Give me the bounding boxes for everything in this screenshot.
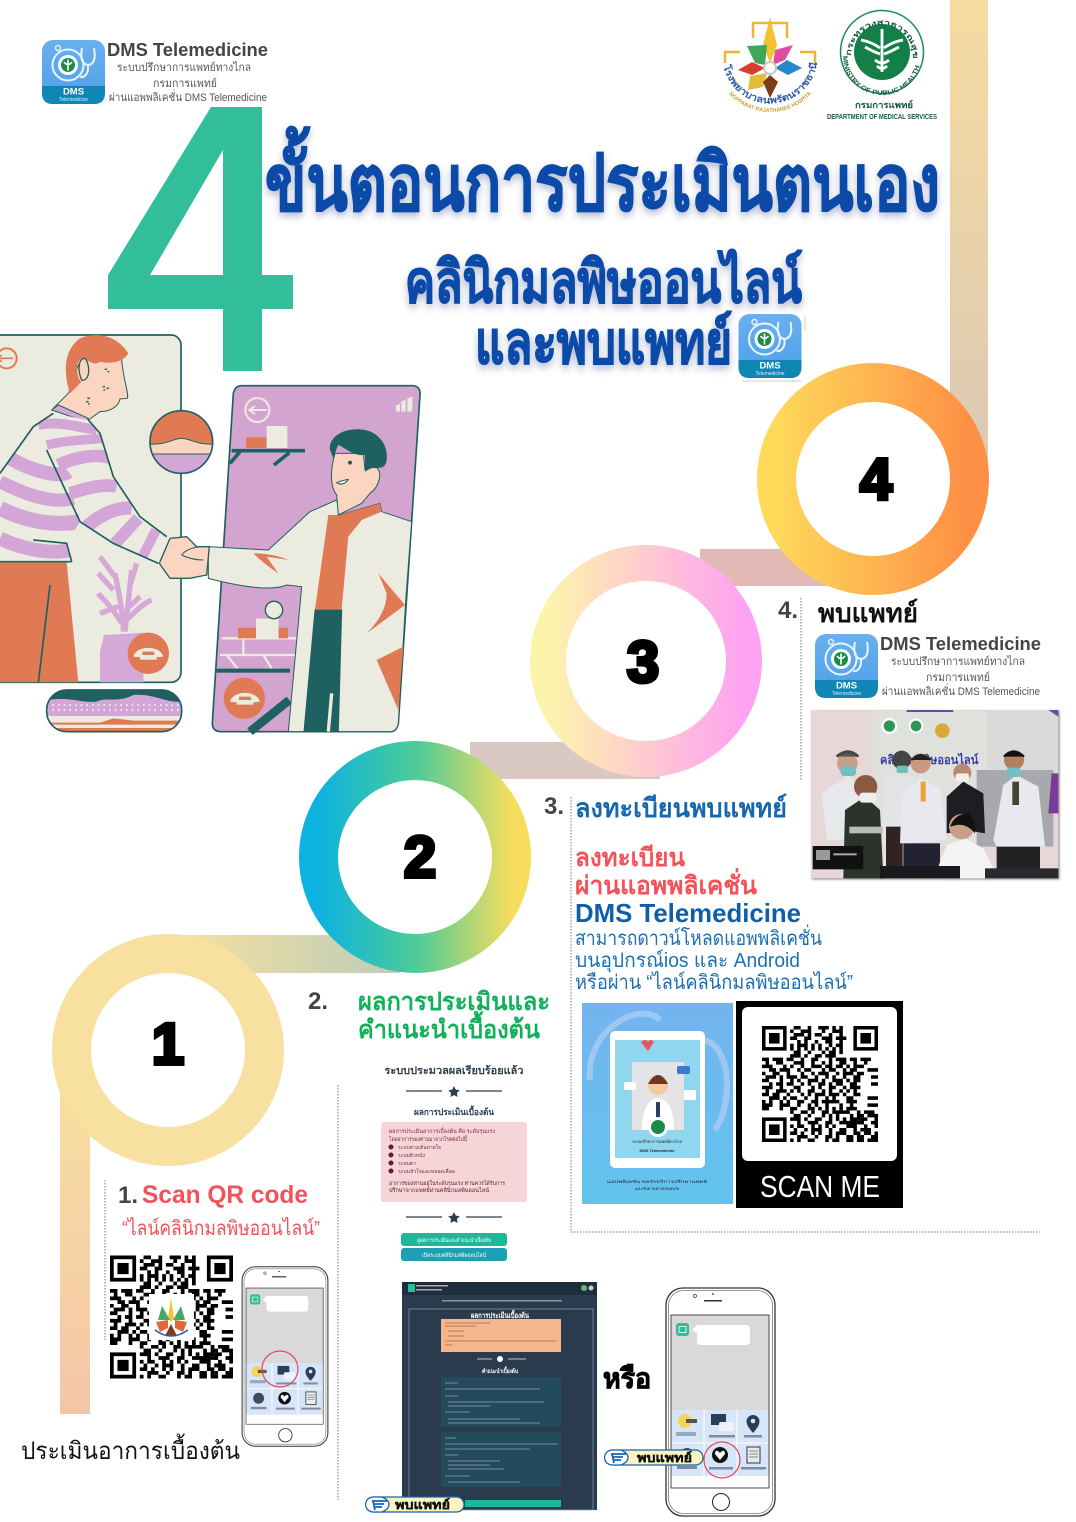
step 3 description: บนอุปกรณ์ios และ Android	[575, 949, 800, 973]
result box: ผลการประเมินอาการเบื้องต้น คือ ระดับรุนแรง	[389, 1127, 495, 1135]
logo: ministry of public health: DEPARTMENT OF MEDICAL SERVICES	[827, 114, 937, 121]
app poster: ระบบปรึกษาการแพทย์ทางไกล	[632, 1139, 683, 1144]
result screen: dark: ผลการประเมินเบื้องต้น	[471, 1309, 530, 1320]
logo: ministry of public health	[827, 10, 937, 121]
logo: DMS Telemedicine step 4: ผ่านแอพพลิเคชั่น DMS Telemedicine	[882, 683, 1040, 698]
step 3 description: สามารถดาวน์โหลดแอพพลิเคชั่น	[575, 924, 822, 950]
caption: initial symptom assessment: ประเมินอาการเบื้องต้น	[21, 1433, 240, 1465]
app poster	[582, 1003, 733, 1204]
phone: LINE menu step 2	[666, 1288, 775, 1516]
logo: DMS Telemedicine header: DMS Telemedicine	[107, 40, 268, 60]
badge: see doctor, dark screen	[366, 1497, 464, 1512]
step 1 heading: Scan QR code	[142, 1181, 308, 1209]
step 3 description: DMS Telemedicine	[575, 898, 801, 928]
result screen: light: ดูผลการประเมินและคำแนะนำเบื้องต้น	[417, 1236, 491, 1244]
step 2 heading: ผลการประเมินและ	[358, 988, 550, 1016]
result screen: light: เปิดระบบคลินิกมลพิษออนไลน์	[422, 1252, 486, 1259]
badge: see doctor, phone: พบแพทย์	[637, 1451, 692, 1465]
step ring 2	[318, 760, 512, 954]
result screen: light: ผลการประเมินเบื้องต้น	[414, 1105, 495, 1117]
QR code: scan me	[736, 1001, 903, 1208]
highlight circle	[704, 1442, 740, 1478]
badge: see doctor, phone	[604, 1450, 703, 1465]
photo: doctors at online clinic launch	[811, 710, 1058, 878]
step 3 description	[575, 844, 853, 994]
step 3 heading: 3.	[544, 793, 564, 820]
QR code: LINE clinic	[110, 1257, 233, 1377]
icon: DMS app	[738, 314, 805, 381]
step ring 1	[72, 954, 264, 1146]
logo: DMS Telemedicine header: ผ่านแอพพลิเคชั่น DMS Telemedicine	[109, 89, 267, 104]
result box: อาการของท่านอยู่ในระดับรุนแรง ท่านควรได้รับการ	[389, 1180, 505, 1187]
logo: DMS Telemedicine step 4: ระบบปรึกษาการแพทย์ทางไกล	[891, 655, 1025, 668]
patient panel	[0, 335, 181, 682]
logo: DMS Telemedicine header: กรมการแพทย์	[153, 77, 217, 90]
step ring 3: 3	[627, 630, 659, 695]
logo: ministry of public health: MINISTRY OF PUBLIC HEALTH	[842, 56, 920, 96]
handshake	[159, 537, 209, 578]
result screen: light	[381, 1064, 527, 1261]
logo: hospital	[724, 17, 818, 112]
step 1 heading: 1.	[118, 1182, 138, 1209]
step 4 heading: 4.	[778, 597, 798, 624]
result box: ระบบทางเดินหายใจ	[398, 1144, 441, 1151]
logo: DMS Telemedicine step 4: DMS Telemedicine	[880, 634, 1041, 654]
result screen: dark: คำแนะนำเบื้องต้น	[482, 1365, 519, 1375]
pill detail	[47, 690, 182, 733]
result box: ระบบหัวใจและหลอดเลือด	[398, 1168, 455, 1175]
step 4 heading	[778, 597, 918, 628]
result box	[381, 1122, 527, 1202]
logo: DMS Telemedicine header: ระบบปรึกษาการแพทย์ทางไกล	[117, 61, 251, 74]
step 1 heading	[118, 1181, 320, 1240]
subtitle line 2: และพบแพทย์	[475, 310, 732, 376]
step 2 heading: คำแนะนำเบื้องต้น	[358, 1010, 540, 1044]
circle detail	[150, 410, 213, 473]
step ring 2: 2	[404, 825, 436, 890]
app poster: แอปพลิเคชัน ขอรับบริการปรึกษาแพทย์	[607, 1179, 707, 1184]
result box: ระบบผิวหนัง	[398, 1152, 426, 1159]
subtitle line 1: คลินิกมลพิษออนไลน์	[405, 249, 802, 315]
step 3 heading: ลงทะเบียนพบแพทย์	[575, 793, 787, 823]
logo: ministry of public health: กรมการแพทย์	[855, 99, 913, 110]
logo: DMS Telemedicine step 4: กรมการแพทย์	[926, 671, 990, 684]
step 3 description: ผ่านแอพพลิเคชั่น	[575, 868, 757, 900]
badge: see doctor, dark screen: พบแพทย์	[395, 1498, 450, 1512]
result screen: light: ระบบประมวลผลเรียบร้อยแล้ว	[384, 1064, 524, 1077]
result screen: dark	[402, 1282, 597, 1510]
step ring 4	[776, 382, 970, 576]
logo: DMS Telemedicine step 4	[815, 634, 1041, 698]
logo: DMS Telemedicine header	[42, 40, 268, 104]
logo: hospital: โรงพยาบาลนพรัตนราชธานี	[724, 62, 818, 104]
photo: doctors at online clinic launch: คลินิกมลพิษออนไลน์	[880, 752, 979, 767]
logo: ministry of public health: กระทรวงสาธารณสุข	[846, 20, 918, 58]
or label: หรือ	[603, 1363, 651, 1394]
step ring 1: 1	[152, 1012, 184, 1077]
result box: ปรึกษาจากแพทย์ผ่านคลินิกมลพิษออนไลน์	[389, 1187, 489, 1194]
phone: LINE menu step 1	[242, 1267, 328, 1446]
illustration: patient and doctor handshake	[0, 335, 420, 733]
big number 4	[108, 107, 293, 371]
highlight circle	[262, 1351, 298, 1387]
result box: โดยอาการของท่านมาจากโรคต่อไปนี้	[389, 1135, 468, 1143]
step 1 heading: “ไลน์คลินิกมลพิษออนไลน์”	[122, 1217, 320, 1240]
app poster: และรับยาอย่างปลอดภัย	[635, 1186, 679, 1191]
doctor panel	[208, 386, 420, 732]
step 2 heading	[308, 988, 550, 1044]
step 4 heading: พบแพทย์	[818, 598, 918, 628]
step ring 4: 4	[860, 447, 892, 512]
step 2 heading: 2.	[308, 988, 328, 1015]
step ring 3	[548, 563, 744, 759]
step 3 description: ลงทะเบียน	[575, 844, 685, 872]
app poster: DMS Telemedicine	[639, 1148, 675, 1153]
step 3 description: หรือผ่าน “ไลน์คลินิกมลพิษออนไลน์”	[575, 971, 853, 994]
result box: ระบบตา	[398, 1161, 416, 1167]
QR code: scan me: SCAN ME	[760, 1169, 880, 1204]
